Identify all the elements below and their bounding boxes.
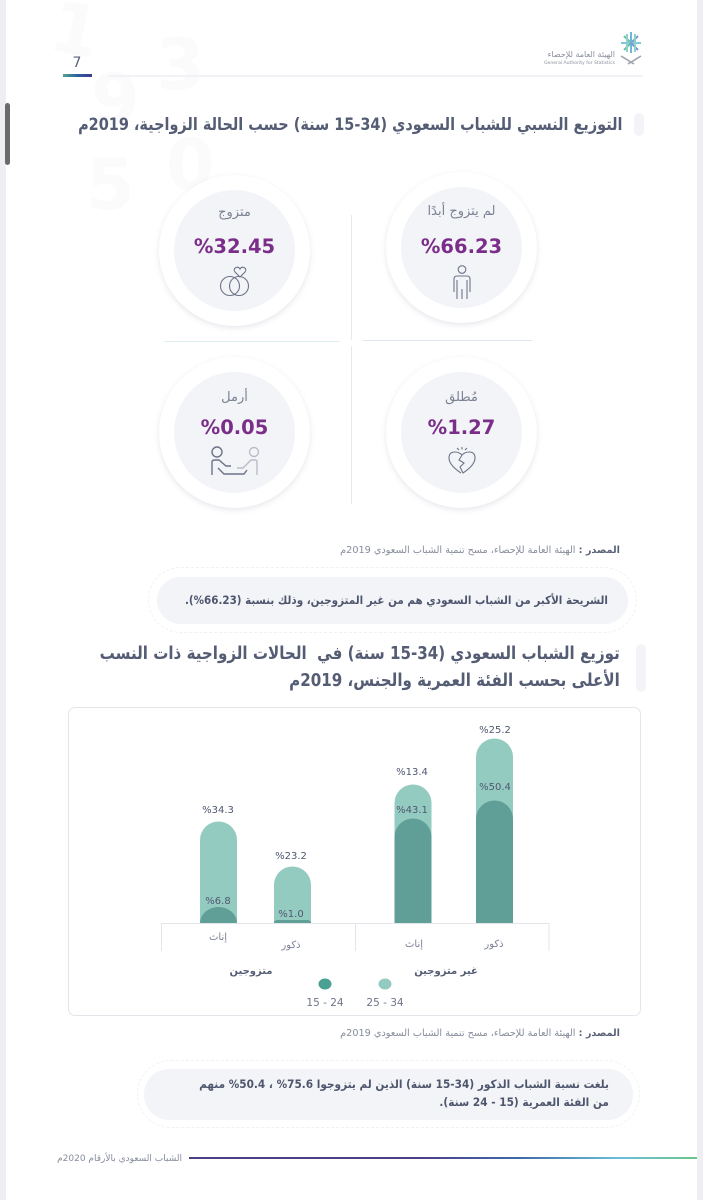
stat inner disc xyxy=(174,372,295,493)
callout text: بلغت نسبة الشباب الذكور (34-15 سنة) الذين لم يتزوجوا 75.6% ، 50.4% منهم xyxy=(199,1077,609,1091)
value: %0.05 xyxy=(201,416,268,439)
legend xyxy=(306,978,403,1008)
category labels: إناث xyxy=(208,932,227,942)
value labels: %50.4 xyxy=(479,782,510,792)
callout 1 xyxy=(148,567,637,633)
bars: married females xyxy=(200,821,236,922)
icon: person xyxy=(453,265,471,299)
background numerals: 0 xyxy=(166,124,215,206)
stat: married xyxy=(159,175,310,326)
stat inner disc xyxy=(401,372,522,493)
label: متزوج xyxy=(218,205,251,220)
heading 2: الأعلى بحسب الفئة العمرية والجنس، 2019م xyxy=(289,671,620,691)
axis frame xyxy=(160,922,548,950)
callout text: الشريحة الأكبر من الشباب السعودي هم من غير المتزوجين، وذلك بنسبة (66.23%). xyxy=(185,593,608,607)
logo text english: General Authority for Statistics xyxy=(544,61,615,66)
heading 2 marker xyxy=(636,644,646,692)
icon: broken heart xyxy=(448,447,476,474)
bars: unmarried males xyxy=(476,738,512,922)
value labels: %25.2 xyxy=(479,724,510,736)
background numerals: 3 xyxy=(156,24,205,106)
source note 1: المصدر : الهيئة العامة للإحصاء، مسح تنمية الشباب السعودي 2019م xyxy=(340,545,620,556)
bars: married males xyxy=(274,866,310,922)
value labels: %43.1 xyxy=(396,804,427,816)
category labels: إناث xyxy=(404,938,423,950)
icon: rings and heart xyxy=(220,266,249,296)
callout background xyxy=(144,1069,633,1120)
page number: 7 xyxy=(73,55,81,71)
legend: 15 - 24 xyxy=(306,996,343,1008)
heading 2: توزيع الشباب السعودي (34-15 سنة) في الحالات الزواجية ذات النسب xyxy=(100,644,620,664)
stat: widowed xyxy=(159,357,310,508)
callout background xyxy=(157,577,628,624)
stat inner disc xyxy=(174,190,295,311)
divider lines xyxy=(164,215,532,504)
footer gradient rule xyxy=(189,1157,697,1159)
label: مُطلق xyxy=(445,390,478,405)
value: %1.27 xyxy=(428,416,495,439)
logo xyxy=(544,32,642,66)
value: %66.23 xyxy=(421,235,502,258)
background numerals: 5 xyxy=(86,144,135,226)
group labels xyxy=(229,966,477,976)
callout text xyxy=(199,1077,609,1109)
header rule xyxy=(108,75,643,77)
scrollbar xyxy=(5,103,10,165)
value labels: %23.2 xyxy=(275,850,306,862)
logo emblem xyxy=(620,32,642,64)
label: لم يتزوج أبدًا xyxy=(428,204,495,219)
label: أرمل xyxy=(221,390,248,405)
footer text: الشباب السعودي بالأرقام 2020م xyxy=(57,1154,182,1164)
stat inner disc xyxy=(401,187,522,308)
category labels: ذكور xyxy=(280,940,300,950)
icon: two people xyxy=(211,446,260,475)
heading 1 marker xyxy=(634,113,644,136)
value labels xyxy=(202,724,510,920)
stat: divorced xyxy=(386,357,537,508)
value labels: %13.4 xyxy=(396,766,427,778)
bar chart xyxy=(161,724,550,1008)
value labels: %6.8 xyxy=(205,896,230,906)
callout text: من الفئة العمرية (15 - 24 سنة). xyxy=(439,1094,609,1108)
logo text arabic: الهيئة العامة للإحصاء xyxy=(548,50,615,59)
value labels: %34.3 xyxy=(202,804,233,816)
bars: unmarried females xyxy=(394,784,431,922)
category labels xyxy=(208,932,503,950)
callout 2 xyxy=(137,1060,640,1128)
page number bar xyxy=(63,74,92,77)
value: %32.45 xyxy=(194,235,275,258)
header xyxy=(63,32,643,77)
heading 2 xyxy=(100,644,620,691)
value labels: %1.0 xyxy=(278,908,303,920)
panel: bar chart xyxy=(68,707,641,1016)
heading 1: التوزيع النسبي للشباب السعودي (34-15 سنة) حسب الحالة الزواجية، 2019م xyxy=(78,115,622,135)
background numerals: 9 xyxy=(91,59,140,141)
category labels: ذكور xyxy=(483,938,503,950)
group labels: متزوجين xyxy=(229,966,272,976)
legend: 25 - 34 xyxy=(366,996,403,1008)
background numerals xyxy=(6,0,306,300)
group labels: غير متزوجين xyxy=(414,966,477,976)
source note 2: المصدر : الهيئة العامة للإحصاء، مسح تنمية الشباب السعودي 2019م xyxy=(340,1028,620,1039)
stat: never married xyxy=(386,172,537,323)
